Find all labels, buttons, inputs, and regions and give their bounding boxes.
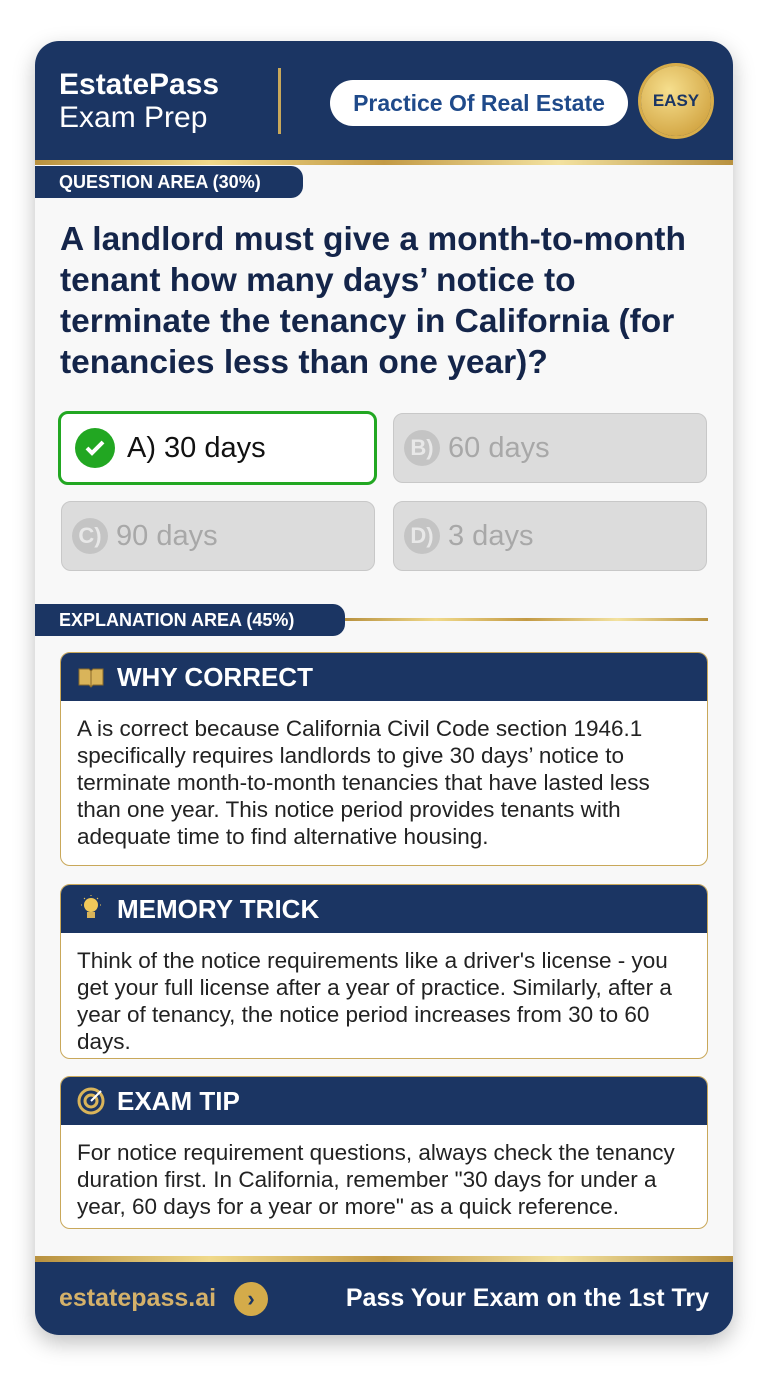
tab: explanation: EXPLANATION AREA (45%) [59,610,294,630]
option D: D) [410,523,434,548]
icon: arrow [234,1282,268,1316]
tab: question area: QUESTION AREA (30%) [59,172,261,192]
badge: easy: EASY [653,91,699,110]
icon: arrow: › [247,1286,255,1311]
panel: exam tip [60,1076,708,1229]
option D: 3 days [448,520,533,552]
category pill: Practice Of Real Estate [353,90,605,116]
tab: explanation [35,604,345,636]
panel: memory trick: MEMORY TRICK [117,894,319,924]
badge: easy [641,66,711,136]
option B [393,413,707,483]
option A correct: A) 30 days [127,432,266,464]
panel: why correct: WHY CORRECT [117,662,313,692]
category pill [330,80,628,126]
logo: EstatePass [59,68,219,101]
option B: B) [410,435,434,460]
panel: exam tip: EXAM TIP [117,1086,240,1116]
tab: question area [35,166,303,198]
option B: 60 days [448,432,550,464]
option C: C) [78,523,102,548]
logo [59,68,219,134]
option A correct [58,411,377,485]
question: A landlord must give a month-to-month tenant how many days’ notice to terminate the tenancy in California (for tenancies less than one year)? [60,221,686,381]
panel: why correct: A is correct because California Civil Code section 1946.1 specifically requires landlords to give 30 days’ notice to terminate month-to-month tenancies that have lasted less than one year. This notice period provides tenants with adequate time to find alternative housing. [77,716,650,849]
option C [61,501,375,571]
tagline: Pass Your Exam on the 1st Try [346,1284,709,1312]
panel: exam tip: For notice requirement questions, always check the tenancy duration first. In California, remember "30 days for under a year, 60 days for a year or more" as a quick reference. [77,1140,675,1219]
panel: why correct [60,652,708,866]
option D [393,501,707,571]
logo: Exam Prep [59,101,207,134]
footer [35,1262,733,1335]
footer url: estatepass.ai [59,1284,216,1312]
panel: memory trick [60,884,708,1059]
panel: memory trick: Think of the notice requirements like a driver's license - you get your full license after a year of practice. Similarly, after a year of tenancy, the notice period increases from 30 to 60 days. [77,948,672,1054]
header [35,41,733,161]
option C: 90 days [116,520,218,552]
